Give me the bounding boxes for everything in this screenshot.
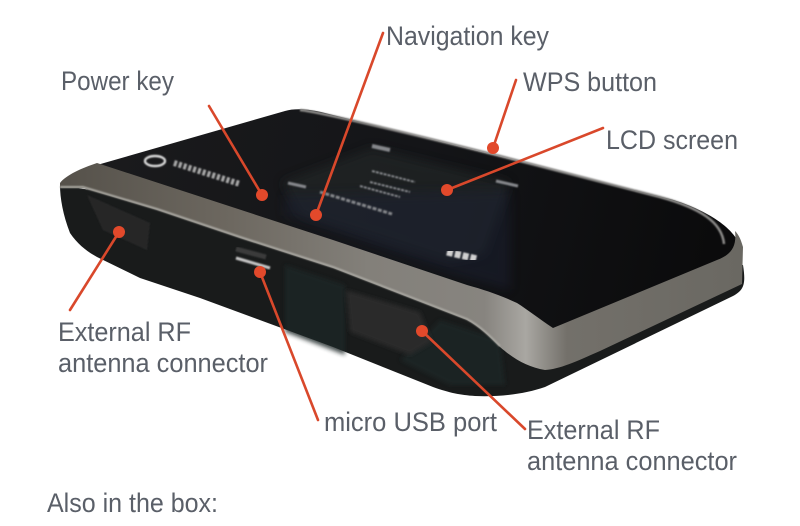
dot: left antenna — [113, 226, 125, 238]
label: micro USB port: micro USB port — [324, 407, 497, 437]
dot: WPS button — [487, 142, 499, 154]
dot: USB — [254, 266, 266, 278]
label: right external RF antenna connector: External RF — [527, 415, 660, 445]
line: LCD screen — [447, 128, 603, 190]
line: USB — [260, 272, 318, 420]
logo — [145, 156, 240, 184]
line: power key — [209, 106, 262, 195]
top surface — [97, 109, 741, 330]
line: WPS button — [493, 80, 516, 148]
label: Navigation key: Navigation key — [386, 21, 549, 51]
label: left external RF antenna connector: External RF — [58, 317, 191, 347]
dot: power key — [256, 189, 268, 201]
logo ring — [145, 156, 165, 166]
label: right external RF antenna connector: antenna connector — [527, 446, 737, 476]
dot: LCD screen — [441, 184, 453, 196]
line: navigation key — [316, 33, 383, 215]
callout dots — [113, 142, 499, 337]
LTE label — [447, 252, 477, 259]
leader lines — [70, 33, 603, 429]
dot: navigation key — [310, 209, 322, 221]
dot: right antenna — [416, 325, 428, 337]
micro USB port — [236, 249, 270, 268]
label: LCD screen: LCD screen — [606, 125, 738, 155]
watermark tint — [285, 190, 510, 290]
label: also in the box: Also in the box: — [47, 488, 218, 518]
label: WPS button: WPS button — [523, 67, 657, 97]
left antenna recess — [87, 195, 150, 250]
top rim highlight — [300, 110, 724, 244]
logo wordmark — [174, 163, 240, 184]
label: left external RF antenna connector: antenna connector — [58, 348, 268, 378]
device lower body — [60, 185, 744, 396]
label: Power key: Power key — [61, 66, 174, 96]
right antenna recess — [346, 290, 432, 355]
screen readouts — [288, 146, 518, 214]
screen area tint — [282, 148, 510, 262]
line: left antenna — [70, 232, 119, 310]
silver band — [60, 163, 743, 370]
device: mobile hotspot — [60, 109, 744, 396]
line: right antenna — [422, 331, 525, 429]
side panel tint — [285, 265, 505, 385]
band highlight — [60, 187, 500, 346]
